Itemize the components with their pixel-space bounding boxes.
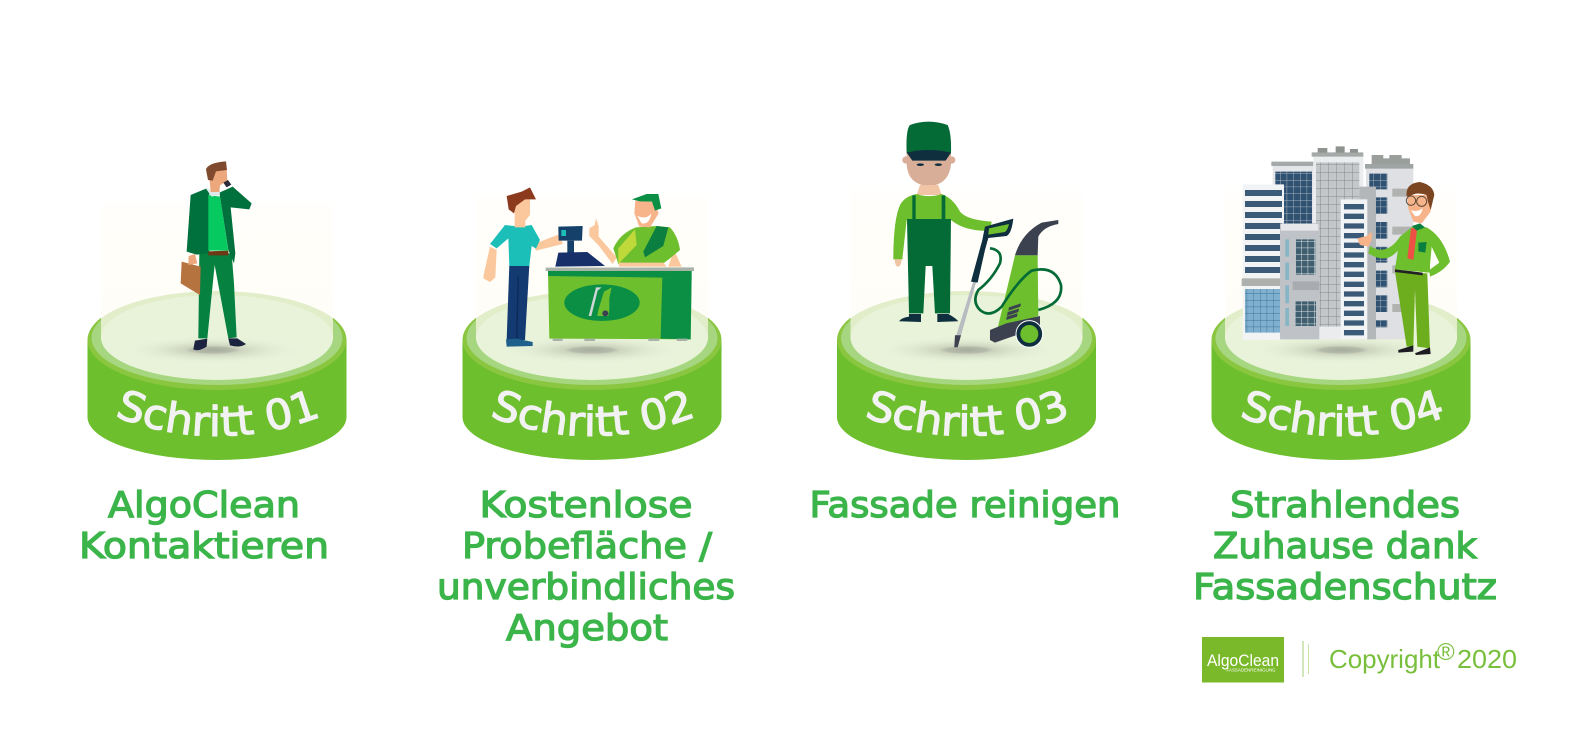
step 3 — [837, 122, 1096, 460]
footer: logo and copyright — [1202, 637, 1517, 682]
copyright text: 2020 — [1457, 644, 1517, 674]
caption: step 4: Fassadenschutz — [1193, 567, 1497, 608]
caption: step 2: Angebot — [506, 608, 668, 649]
caption: step 4: Strahlendes — [1230, 485, 1460, 526]
caption: step 1 — [79, 485, 329, 567]
step 2 — [462, 187, 722, 460]
icon: buildings with happy man — [1242, 146, 1450, 355]
icon: worker with pressure washer — [893, 122, 1061, 347]
caption: step 4 — [1193, 485, 1497, 608]
icon: businessman on phone — [181, 161, 252, 350]
caption: step 1: AlgoClean — [108, 485, 300, 526]
copyright text: Copyright — [1329, 644, 1441, 674]
step 4 — [1212, 146, 1470, 460]
pedestal 2 — [462, 294, 722, 460]
pedestal 1: Schritt 01 — [116, 390, 318, 436]
logo: FASSADENREINIGUNG — [1226, 668, 1276, 672]
pedestal 3 — [837, 291, 1096, 460]
caption: step 2: Probefläche / — [462, 526, 713, 567]
copyright text: ® — [1437, 639, 1455, 666]
caption: step 4: Zuhause dank — [1213, 526, 1477, 567]
infographic canvas — [82, 122, 1516, 682]
pedestal 3: Schritt 03 — [866, 390, 1066, 436]
pedestal 1 — [88, 291, 346, 460]
pedestal 2: Schritt 02 — [492, 390, 694, 436]
logo — [1202, 637, 1284, 682]
icon: customer at service counter — [483, 187, 694, 347]
caption: step 3: Fassade reinigen — [810, 485, 1120, 526]
pedestal 4 — [1212, 300, 1470, 460]
step 1 — [88, 161, 346, 460]
logo: AlgoClean — [1207, 651, 1279, 670]
caption: step 2: unverbindliches — [437, 567, 735, 608]
pedestal 4: Schritt 04 — [1241, 390, 1442, 436]
caption: step 1: Kontaktieren — [79, 526, 329, 567]
caption: step 2: Kostenlose — [480, 485, 692, 526]
copyright text — [1329, 639, 1517, 674]
caption: step 2 — [437, 485, 735, 649]
